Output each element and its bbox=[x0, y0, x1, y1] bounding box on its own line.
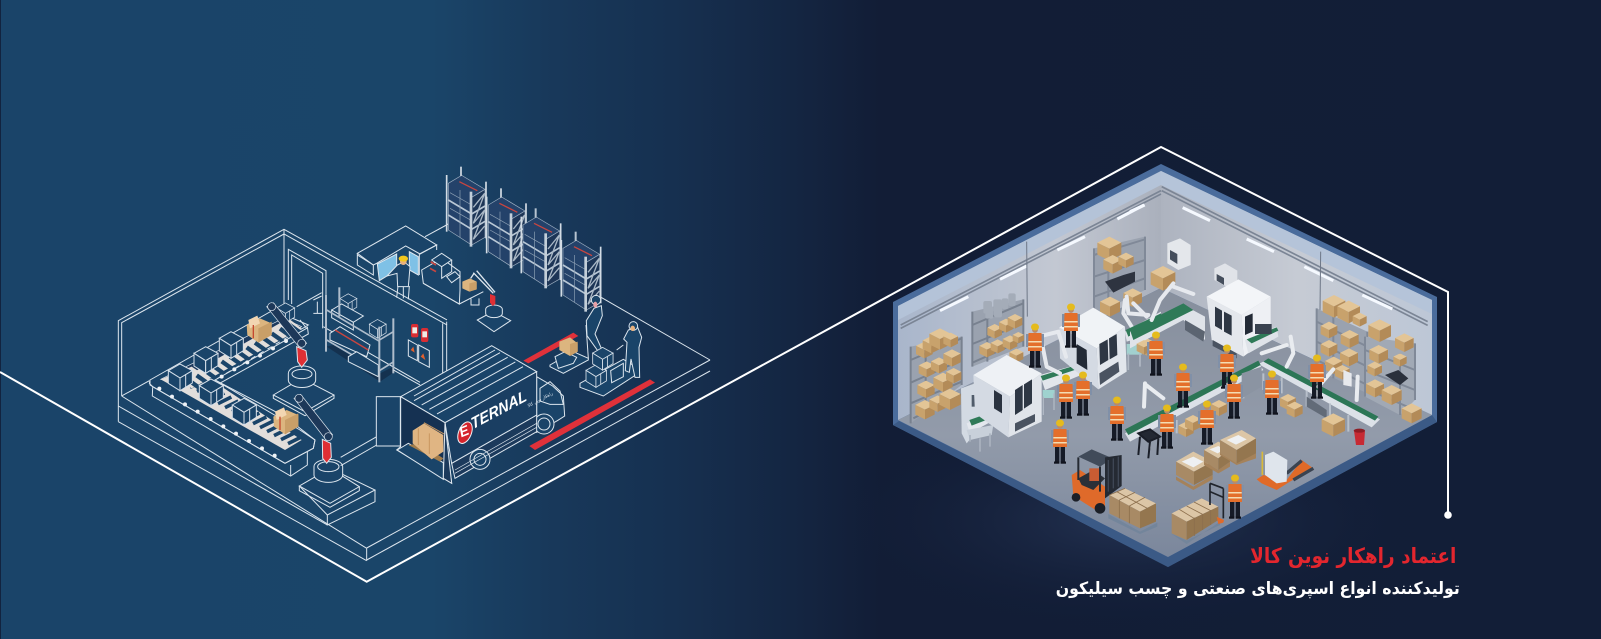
conveyor long central branch bbox=[1125, 361, 1263, 448]
truck logo bbox=[455, 387, 554, 446]
floor-side box behind machine bbox=[1138, 338, 1156, 356]
racks, control room, truck and workers line art bbox=[357, 167, 710, 483]
fire extinguishers bbox=[411, 324, 428, 342]
right shelf E bbox=[1365, 319, 1422, 423]
pallets and forklift foreground bbox=[1072, 430, 1256, 544]
right shelf D bbox=[1317, 295, 1367, 393]
soft glow beneath the factory room bbox=[830, 410, 1430, 630]
truck logo: TERNAL bbox=[469, 387, 528, 433]
line from robot to truck door bbox=[341, 437, 377, 466]
connector outline line with end dot bbox=[0, 147, 1452, 582]
dark table under conveyor bbox=[1138, 429, 1160, 458]
conveyor behind robots bbox=[1125, 312, 1161, 342]
room outer shell bbox=[893, 164, 1437, 567]
door frame in partition wall bbox=[288, 249, 326, 332]
floor boxes bbox=[1137, 340, 1345, 437]
left shelf A bbox=[911, 328, 962, 423]
floor box near back wall bbox=[1151, 266, 1175, 291]
rear pallet stacks bbox=[1176, 430, 1256, 490]
room right wall rail and lights bbox=[1125, 187, 1428, 490]
conveyor near machine two bbox=[1040, 363, 1085, 415]
machine one bbox=[973, 355, 1042, 437]
small control cabinet and conveyor bbox=[961, 383, 1000, 452]
left shelf C bbox=[1094, 237, 1145, 317]
factory line art illustration: production hall bbox=[118, 229, 447, 561]
cardboard boxes held by robots bbox=[247, 316, 298, 434]
control room bbox=[357, 226, 483, 304]
title: company name: اعتماد راهکار نوین کالا bbox=[1250, 544, 1456, 568]
wireframe boxes on conveyor bbox=[168, 303, 295, 425]
red floor markings bbox=[523, 333, 655, 450]
line-art worker at control panel bbox=[387, 256, 410, 299]
machine three bbox=[1207, 279, 1271, 358]
room left wall rail and lights bbox=[901, 191, 1161, 452]
robot arm front bbox=[294, 394, 375, 525]
truck rear door panel bbox=[376, 397, 400, 446]
robots right bbox=[1144, 337, 1358, 407]
factory room 3D render bbox=[893, 164, 1437, 567]
forklift pallet of boxes bbox=[1108, 488, 1157, 534]
right wall bbox=[1161, 171, 1432, 415]
front pallet of boxes bbox=[1171, 483, 1224, 544]
slab right edges of the line-art factory bbox=[367, 360, 710, 560]
line-art worker with cart and boxes bbox=[580, 322, 642, 396]
electrical cabinets bbox=[408, 340, 429, 367]
line-art worker pulling cart bbox=[550, 295, 602, 373]
forklift bbox=[1072, 449, 1122, 514]
truck logo: E bbox=[456, 422, 472, 440]
delivery truck bbox=[397, 346, 565, 483]
small robot arm with box bbox=[462, 271, 511, 332]
shelf in hall bbox=[326, 287, 395, 382]
left wall bbox=[898, 171, 1161, 420]
machine two bbox=[1059, 308, 1127, 389]
conveyor belt L-shape bbox=[149, 310, 315, 476]
pallet truck right bbox=[1257, 452, 1313, 490]
truck logo: راهکار نوین کالا bbox=[526, 391, 554, 409]
room bottom edge bbox=[893, 415, 1437, 567]
wall top band bbox=[898, 171, 1432, 320]
conveyor right branch bbox=[1258, 358, 1380, 432]
back conveyors and robots bbox=[1130, 283, 1205, 348]
red bucket bbox=[1354, 429, 1365, 445]
small machine by conveyor bbox=[1245, 324, 1278, 353]
robot arms white left bbox=[1038, 297, 1148, 373]
robot arm rear bbox=[267, 303, 334, 416]
wall cabinets bbox=[1167, 238, 1237, 287]
floor bbox=[898, 288, 1432, 557]
partition wall end bbox=[393, 322, 447, 385]
storage racks bbox=[447, 167, 601, 312]
subtitle: product description: تولیدکننده انواع اسپری‌های صنعتی و چسب سیلیکون bbox=[1056, 579, 1460, 599]
background dark left edge bbox=[0, 0, 1, 639]
small table at machine two bbox=[1127, 344, 1142, 370]
workers in factory bbox=[1026, 304, 1326, 519]
left shelf B bbox=[972, 293, 1024, 367]
